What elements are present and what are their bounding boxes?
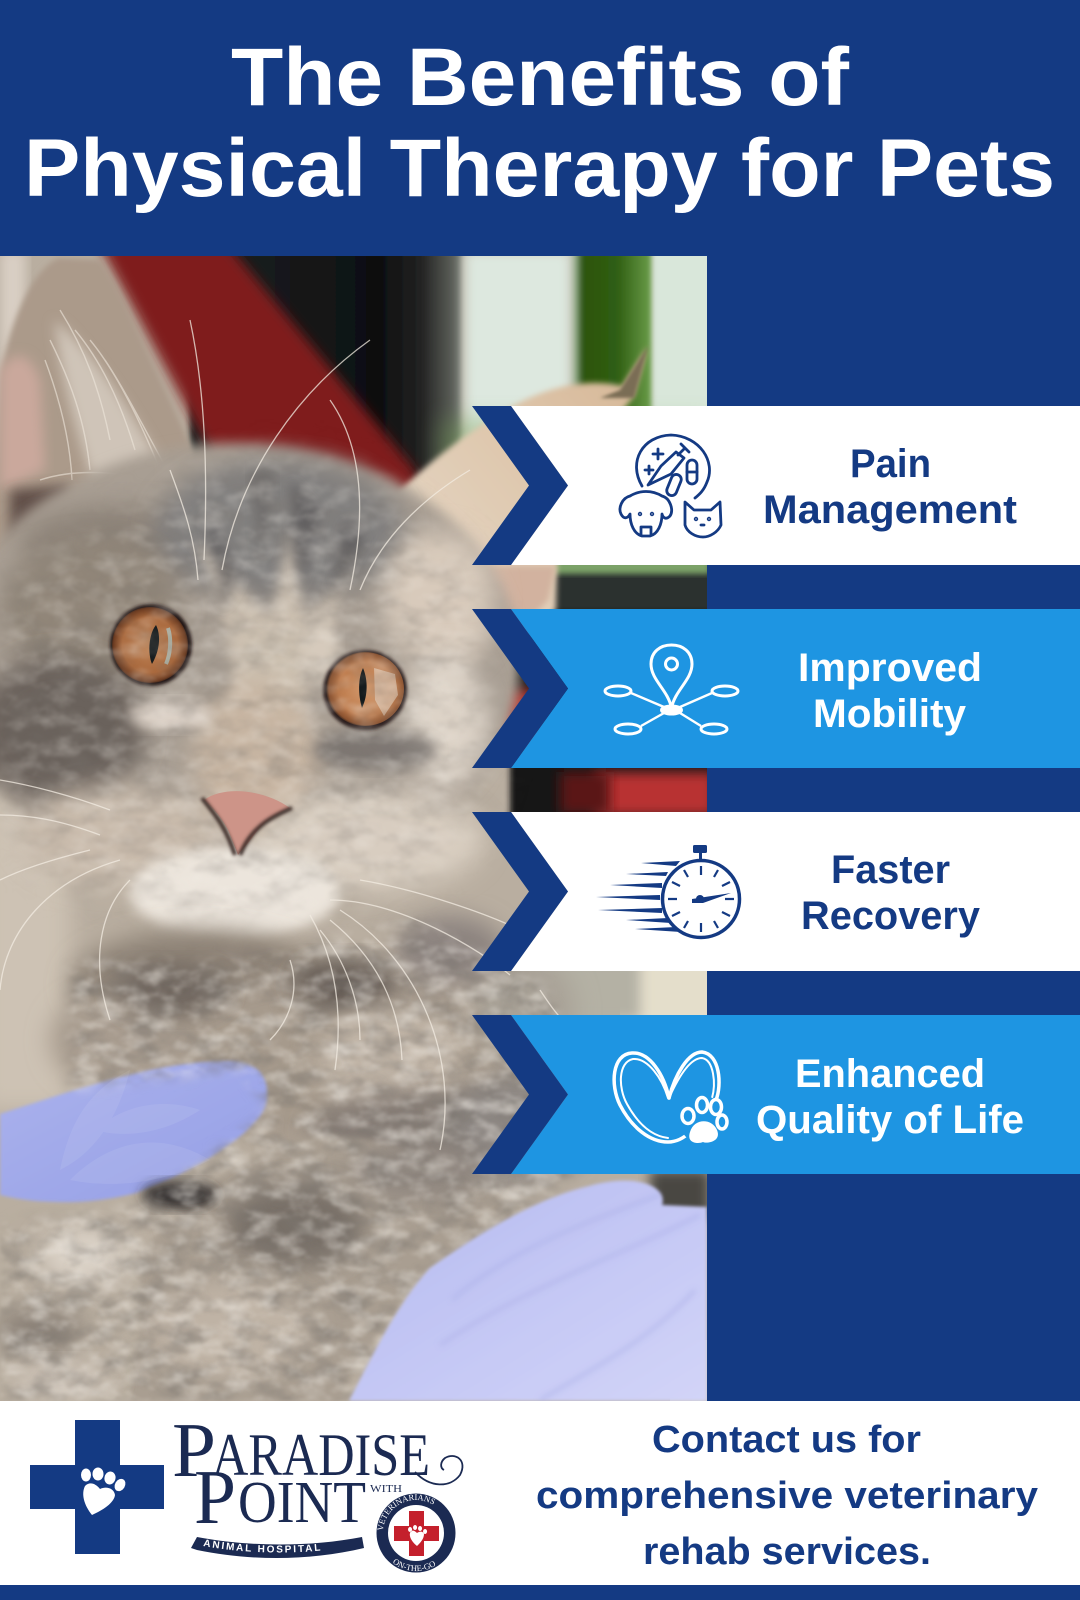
label: Enhanced xyxy=(795,1052,985,1096)
logo: Veterinarians On-The-Go badge: ON-THE-GO xyxy=(393,1559,435,1572)
cat whiskers xyxy=(0,320,590,1150)
right gloved hand xyxy=(349,1181,707,1401)
icon: stopwatch xyxy=(596,845,740,938)
label: Improved xyxy=(798,646,982,690)
muzzle xyxy=(193,680,317,840)
logo: Paradise Point wordmark: OINT xyxy=(238,1469,366,1535)
logo: Veterinarians On-The-Go badge xyxy=(376,1494,456,1572)
label: Mobility xyxy=(813,692,967,736)
logo: Animal Hospital ribbon xyxy=(191,1537,364,1558)
photo background blurred stripes xyxy=(0,240,720,1410)
cat ears xyxy=(0,258,648,660)
icon: medicine, dog and cat xyxy=(620,435,721,537)
cat head xyxy=(0,443,520,938)
cat arm fur xyxy=(0,1135,525,1401)
footer call to action: comprehensive veterinary xyxy=(536,1475,1038,1517)
banner: Improved Mobility xyxy=(472,609,1080,768)
photo: kitten held by gloved hands xyxy=(0,240,720,1410)
logo: Paradise Point wordmark xyxy=(172,1407,462,1540)
chevron xyxy=(472,406,568,565)
logo: Animal Hospital ribbon: ANIMAL HOSPITAL xyxy=(203,1540,320,1553)
label: Quality of Life xyxy=(756,1098,1024,1142)
label: Faster xyxy=(831,848,950,892)
glove leaf watermark xyxy=(126,1071,170,1181)
footer call to action xyxy=(536,1419,1038,1573)
forehead stripes xyxy=(194,537,350,717)
label: Pain xyxy=(850,442,931,486)
footer call to action: rehab services. xyxy=(643,1531,931,1573)
chevron xyxy=(472,609,568,768)
logo: blue cross with paw xyxy=(30,1420,164,1554)
label: Management xyxy=(763,488,1017,532)
label xyxy=(801,848,981,938)
chevron xyxy=(472,812,568,971)
title: Physical Therapy for Pets xyxy=(24,123,1055,214)
footer panel xyxy=(0,1401,1080,1585)
label xyxy=(763,442,1017,532)
banner: Pain Management xyxy=(472,406,1080,565)
title: The Benefits of xyxy=(231,32,850,123)
logo: Veterinarians On-The-Go badge: VETERINARIANS xyxy=(377,1494,436,1530)
logo: Paradise Point wordmark: WITH xyxy=(370,1484,402,1495)
banner: Faster Recovery xyxy=(472,812,1080,971)
banner: Enhanced Quality of Life xyxy=(472,1015,1080,1174)
logo: Paradise Point wordmark: P xyxy=(194,1454,236,1540)
icon: location pin network xyxy=(605,645,738,734)
footer call to action: Contact us for xyxy=(652,1419,921,1461)
fur texture xyxy=(0,460,574,1401)
cat eyes xyxy=(110,604,407,730)
label xyxy=(798,646,982,736)
cat chest fur xyxy=(50,915,585,1185)
cat nose xyxy=(202,791,292,855)
icon: heart with paw xyxy=(614,1052,727,1144)
title xyxy=(24,32,1055,214)
logo: Paradise Point wordmark: P xyxy=(172,1407,216,1493)
label: Recovery xyxy=(801,894,981,938)
left gloved finger xyxy=(0,1061,267,1202)
chevron xyxy=(472,1015,568,1174)
logo: Paradise Point wordmark: ARADISE xyxy=(212,1422,430,1488)
label xyxy=(756,1052,1024,1142)
